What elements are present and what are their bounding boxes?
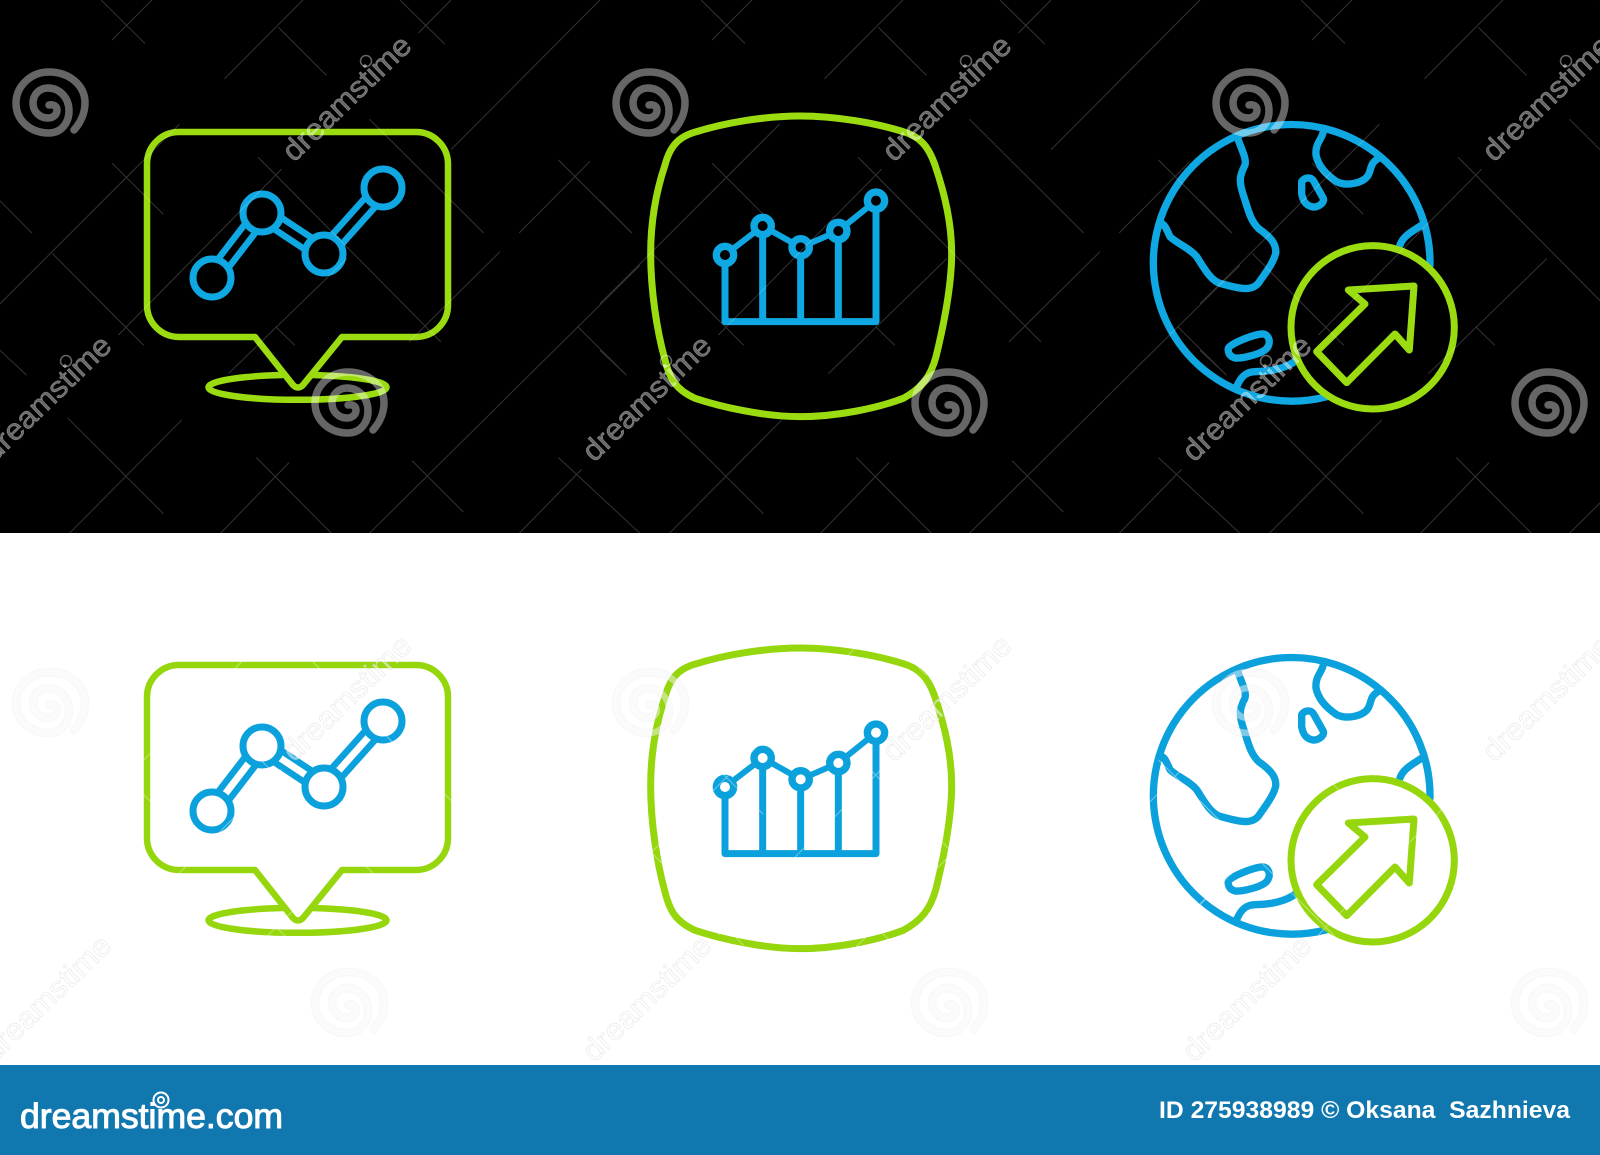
arrow badge xyxy=(1291,246,1454,409)
data point circles xyxy=(193,169,402,297)
footer logo text: dreamstime.com xyxy=(20,1097,283,1136)
chart bars and axis xyxy=(725,201,876,322)
double line connectors xyxy=(212,188,383,278)
bubble outline with pointer xyxy=(147,132,448,388)
watermark: light panel: dreamstime xyxy=(276,629,418,768)
squircle outline xyxy=(651,648,952,949)
footer image id and author: ID 275938989 © Oksana Sazhnieva xyxy=(1159,1097,1571,1124)
double line connectors xyxy=(212,721,383,811)
squircle outline xyxy=(651,116,952,417)
globe and continents xyxy=(1153,657,1430,934)
watermark: dark panel: dreamstime xyxy=(576,329,718,468)
icon: globe with outward arrow, light version xyxy=(1153,657,1454,942)
icon: squircle with bar and line chart xyxy=(651,116,952,417)
chart trend line xyxy=(725,733,876,787)
icon: globe with outward arrow xyxy=(1153,124,1454,409)
panel: white icon row xyxy=(0,640,1600,1060)
icon: squircle with bar and line chart, light version xyxy=(651,648,952,949)
chart bars and axis xyxy=(725,733,876,854)
chart data points xyxy=(716,724,885,796)
icon: map pin speech bubble with line chart xyxy=(147,132,448,400)
footer bar xyxy=(0,1065,1600,1155)
watermark: dark panel xyxy=(0,0,1600,533)
watermark: dark panel: dreamstime xyxy=(1176,329,1318,468)
globe and continents xyxy=(1153,124,1430,401)
watermark: light panel: dreamstime xyxy=(1176,929,1318,1068)
chart data points xyxy=(716,192,885,264)
panel: black icon row xyxy=(0,0,1600,533)
chart trend line xyxy=(725,201,876,255)
watermark: light panel xyxy=(0,640,1600,1060)
footer logo spiral xyxy=(154,1092,168,1108)
watermark: dark panel: dreamstime xyxy=(876,29,1018,168)
watermark: light panel: dreamstime xyxy=(876,629,1018,768)
bubble outline with pointer xyxy=(147,665,448,920)
pin base ellipse xyxy=(208,375,386,400)
watermark: light panel: dreamstime xyxy=(576,929,718,1068)
icon: map pin speech bubble with line chart, light version xyxy=(147,665,448,933)
pin base ellipse xyxy=(208,908,386,933)
watermark: dark panel: dreamstime xyxy=(276,29,418,168)
arrow badge xyxy=(1291,779,1454,942)
data point circles xyxy=(193,702,402,830)
